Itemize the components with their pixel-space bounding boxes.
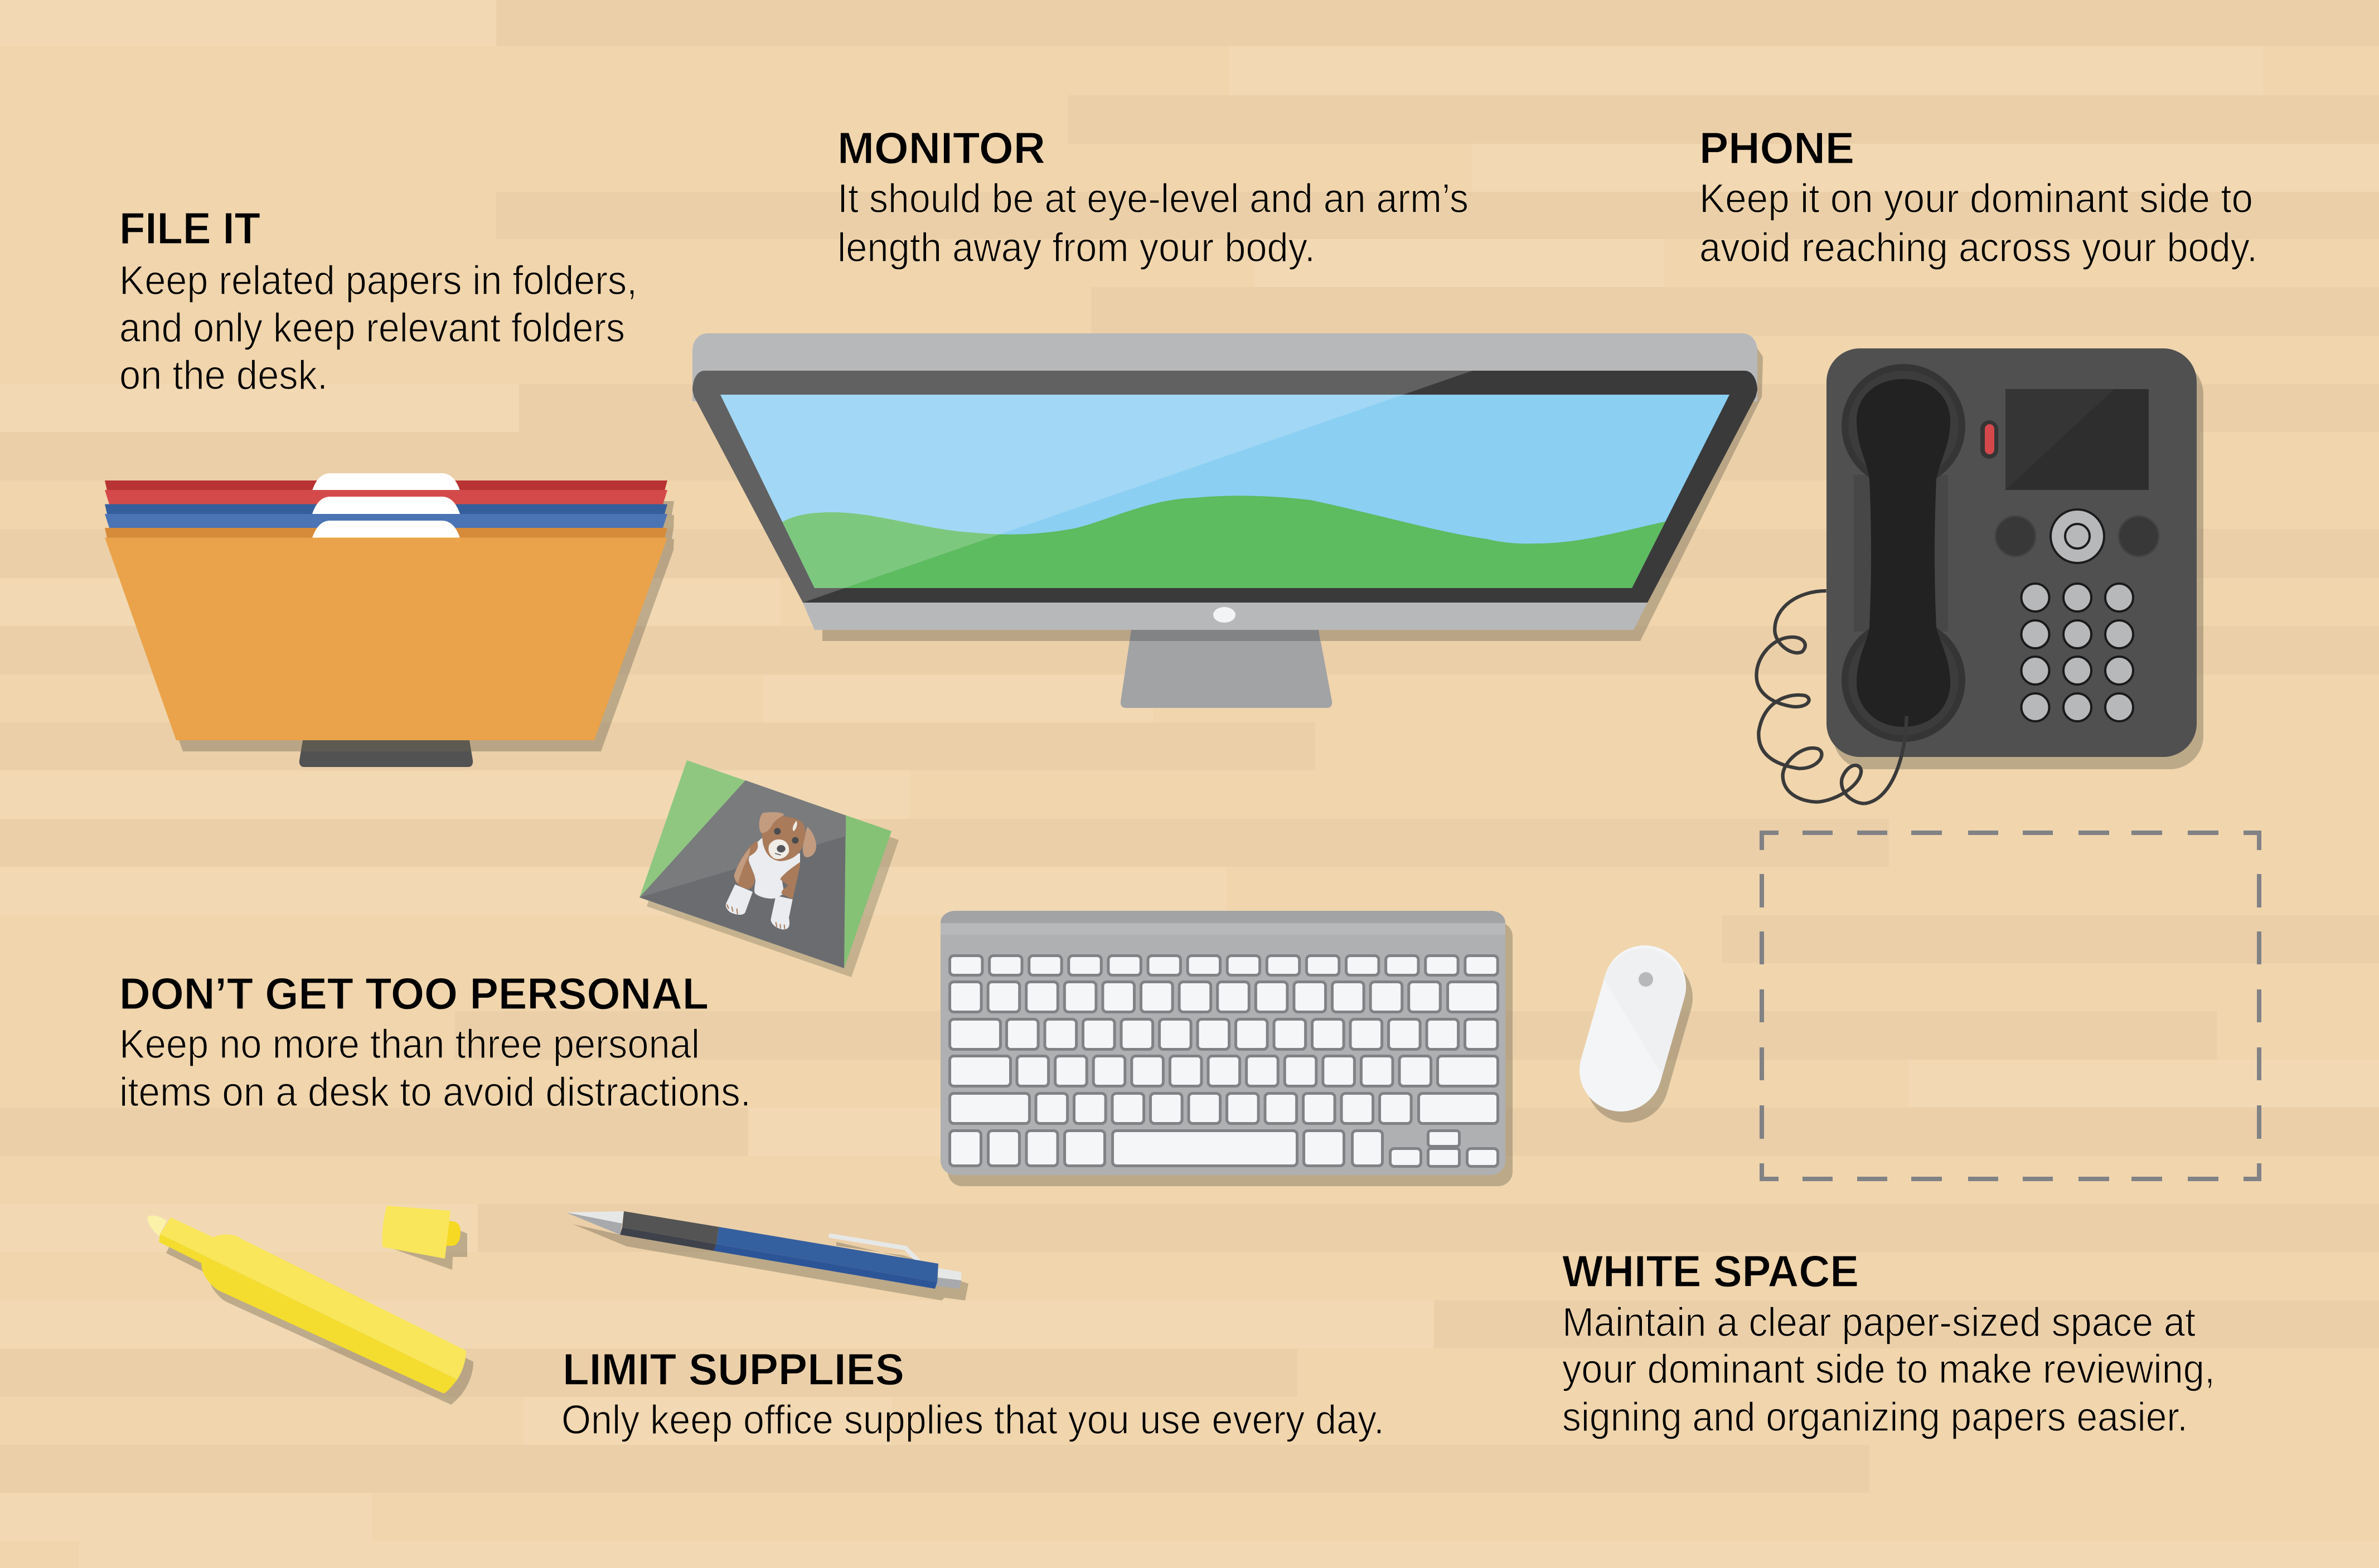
icon: highlighter and cap xyxy=(147,1206,473,1405)
body: don't get too personal: items on a desk to avoid distractions. xyxy=(119,1070,751,1115)
text block: white space xyxy=(1562,1246,2215,1440)
body: limit supplies: Only keep office supplies that you use every day. xyxy=(561,1397,1384,1443)
monitor rear top xyxy=(692,333,1757,401)
highlighter shadow xyxy=(166,1229,473,1405)
dog xyxy=(726,812,816,929)
body: white space: signing and organizing papers easier. xyxy=(1562,1395,2188,1440)
body: monitor xyxy=(837,176,1469,270)
blue folder xyxy=(105,497,667,528)
body: file it: Keep related papers in folders, xyxy=(119,258,637,303)
body: file it xyxy=(119,258,637,398)
screen glare xyxy=(669,357,1472,603)
keyboard body xyxy=(941,911,1505,1175)
phone shadow xyxy=(1833,361,2203,769)
monitor bezel xyxy=(692,371,1757,603)
icon: mouse xyxy=(1600,925,1706,1081)
mouse scroll dot xyxy=(1639,972,1653,987)
pen barrel xyxy=(714,1227,938,1289)
pen tip xyxy=(566,1211,624,1235)
handset cradle xyxy=(1842,364,1965,742)
photo shadow xyxy=(647,769,899,977)
folder stand xyxy=(299,740,473,767)
phone display xyxy=(2005,389,2149,490)
body: monitor: It should be at eye-level and an arm’s xyxy=(837,176,1469,221)
icon: file folders xyxy=(105,473,674,767)
pen shadow xyxy=(573,1224,968,1300)
text block: limit supplies xyxy=(561,1344,1384,1443)
folder shadow xyxy=(112,501,674,751)
mouse body xyxy=(1621,987,1645,1070)
body: phone: Keep it on your dominant side to xyxy=(1699,176,2253,221)
heading: don't get too personal: DON’T GET TOO PERSONAL xyxy=(119,969,709,1018)
body: white space: Maintain a clear paper-sized space at xyxy=(1562,1300,2196,1345)
keyboard shadow xyxy=(948,922,1513,1186)
mouse shadow xyxy=(1627,998,1651,1081)
red folder xyxy=(105,473,667,504)
text block: phone xyxy=(1699,123,2257,270)
mouse shaded half xyxy=(1600,925,1706,1074)
keypad xyxy=(2022,584,2133,721)
body: phone: avoid reaching across your body. xyxy=(1699,225,2257,270)
cap clip xyxy=(445,1221,461,1246)
photo green backdrop xyxy=(639,760,891,968)
highlighter cap xyxy=(382,1206,450,1259)
heading: phone: PHONE xyxy=(1699,123,1854,173)
heading: limit supplies: LIMIT SUPPLIES xyxy=(563,1344,904,1394)
icon: framed dog photo xyxy=(639,760,899,977)
pen grip xyxy=(620,1211,719,1251)
keyboard keys xyxy=(950,955,1498,1166)
monitor logo xyxy=(1213,607,1235,623)
heading: file it: FILE IT xyxy=(119,203,260,253)
icon: pen xyxy=(566,1211,968,1300)
highlighter lower side xyxy=(159,1234,457,1394)
body: white space: your dominant side to make reviewing, xyxy=(1562,1347,2215,1392)
body: file it: on the desk. xyxy=(119,353,328,398)
monitor stand xyxy=(1121,630,1332,708)
keyboard top strip xyxy=(941,911,1505,935)
monitor shadow xyxy=(822,348,1763,641)
body: white space xyxy=(1562,1300,2215,1440)
icon: keyboard xyxy=(941,911,1513,1186)
icon: computer monitor xyxy=(669,333,1763,708)
phone cord xyxy=(1756,591,1864,804)
body: phone xyxy=(1699,176,2257,270)
text block: don't get too personal xyxy=(119,969,751,1115)
cap shadow xyxy=(389,1226,467,1270)
body: file it: and only keep relevant folders xyxy=(119,305,625,351)
red indicator light xyxy=(1980,420,1998,459)
body: don't get too personal xyxy=(119,1022,751,1115)
text block: file it xyxy=(119,203,637,398)
heading: white space: WHITE SPACE xyxy=(1562,1246,1859,1296)
body: monitor: length away from your body. xyxy=(837,225,1315,270)
highlighter tip xyxy=(147,1216,167,1236)
cord over handset xyxy=(1864,716,1907,804)
navigation buttons xyxy=(1995,509,2159,563)
body: don't get too personal: Keep no more than three personal xyxy=(119,1022,700,1067)
pen end button xyxy=(936,1268,961,1289)
icon: desk phone xyxy=(1756,348,2203,804)
monitor chin xyxy=(803,603,1648,630)
orange folder xyxy=(105,521,667,740)
text block: monitor xyxy=(837,123,1469,270)
photo gray floor xyxy=(639,780,846,968)
phone body xyxy=(1826,348,2197,757)
dashed paper-sized white space xyxy=(1762,833,2259,1179)
pen clip xyxy=(831,1236,926,1263)
highlighter upper side xyxy=(160,1217,466,1380)
monitor screen xyxy=(714,390,1734,591)
handset xyxy=(1857,379,1950,727)
heading: monitor: MONITOR xyxy=(837,123,1045,173)
